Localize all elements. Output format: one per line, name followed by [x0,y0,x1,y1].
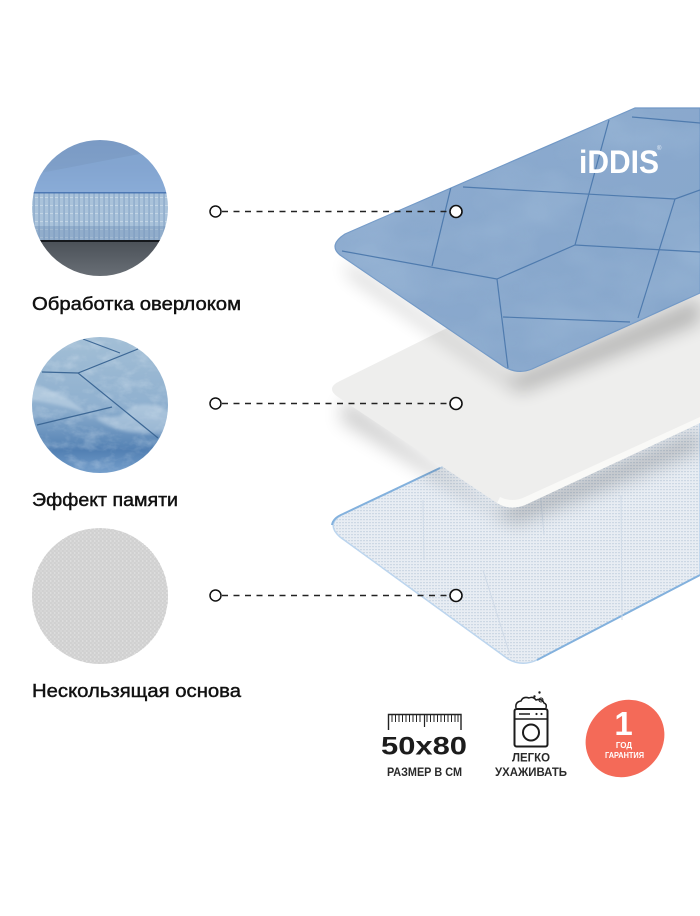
care caption line 1: ЛЕГКО [512,752,550,764]
care caption line 2: УХАЖИВАТЬ [495,767,567,779]
callout: memory effect [30,336,462,510]
callout: anti-slip base [32,528,462,701]
label: Нескользящая основа [32,680,242,701]
size badge [381,714,467,779]
size caption: РАЗМЕР В СМ [387,767,462,779]
mat layer: blue memory foam top [330,108,700,392]
icon: washing machine [514,691,548,746]
size value: 50x80 [381,732,467,760]
logo: IDDIS: iDDIS [579,144,659,180]
icon: ruler [388,714,461,730]
marker left [210,590,221,601]
logo: IDDIS: ® [657,145,662,152]
mat layer: anti-slip base [332,350,700,663]
care badge [495,691,567,779]
warranty number: 1 [614,705,633,742]
mat layer: white foam core [332,205,700,525]
marker right [450,590,462,602]
label: Эффект памяти [32,489,178,510]
marker right [450,398,462,410]
callout: overlock [30,138,462,314]
marker left [210,398,221,409]
marker left [210,206,221,217]
warranty caption line 1: ГОД [616,741,632,750]
marker right [450,206,462,218]
label: Обработка оверлоком [32,293,241,314]
dashed leader [222,210,450,212]
warranty badge [570,684,680,793]
dashed leader [222,594,450,596]
photo circle: woven texture [32,528,168,664]
warranty caption line 2: ГАРАНТИЯ [605,751,644,760]
badge shape [570,684,680,793]
dashed leader [222,402,450,404]
photo circle: overlock edge [30,138,170,278]
photo circle: memory foam [30,336,170,476]
